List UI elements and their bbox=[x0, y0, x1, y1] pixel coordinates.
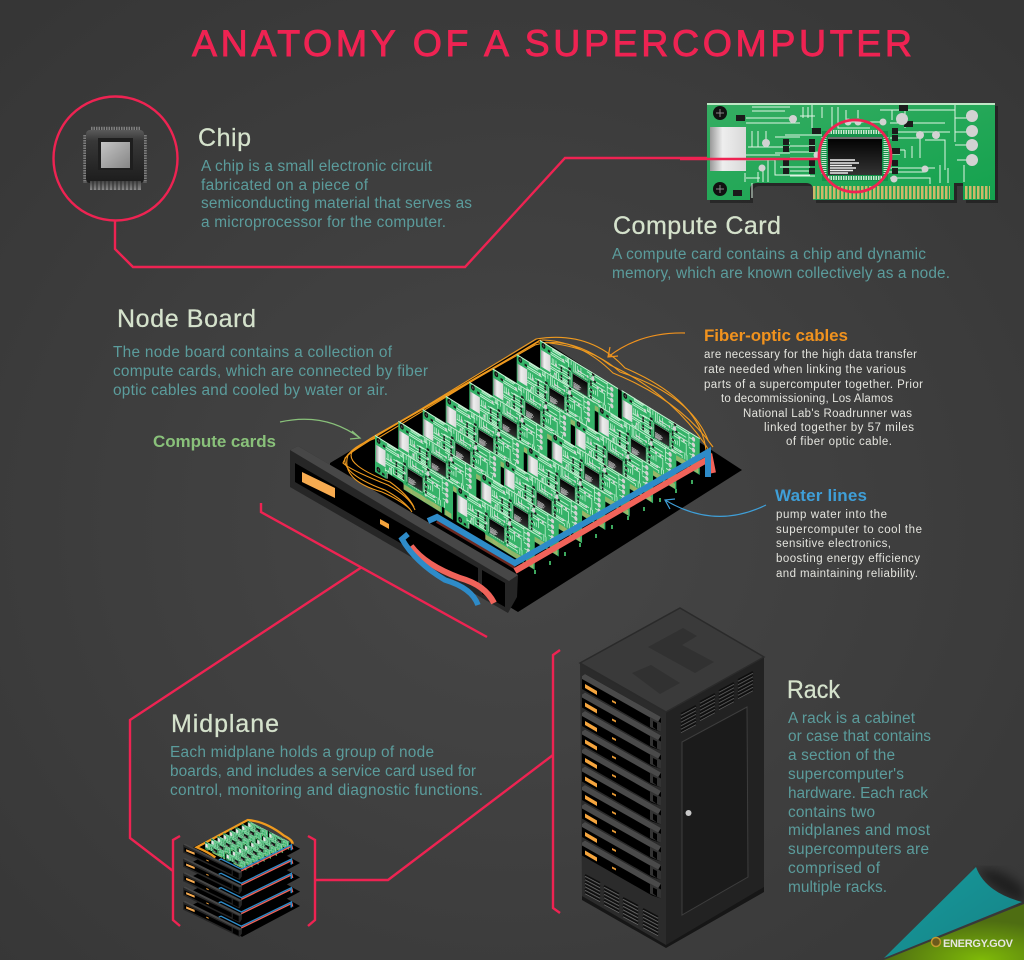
text: water lines description: pump water into the bbox=[776, 509, 887, 521]
text: rack description: midplanes and most bbox=[788, 822, 931, 839]
text: water lines description: supercomputer to cool the bbox=[776, 524, 922, 536]
label: fiber-optic cables: Fiber-optic cables bbox=[704, 326, 848, 345]
arrow: fiber-optic cables bbox=[608, 333, 685, 357]
panel: midplane bbox=[170, 710, 483, 937]
icon: microchip bbox=[85, 128, 145, 190]
text: fiber-optic description: rate needed when linking the various bbox=[704, 364, 906, 376]
heading: compute card: Compute Card bbox=[613, 212, 781, 240]
page curl with energy.gov logo bbox=[884, 867, 1024, 960]
text: rack description: supercomputer's bbox=[788, 766, 904, 783]
text: chip description: A chip is a small electronic circuit bbox=[201, 158, 433, 175]
text: rack description: contains two bbox=[788, 804, 875, 821]
illustration: node board bbox=[290, 337, 742, 613]
text: energy.gov: ENERGY.GOV bbox=[943, 938, 1014, 950]
panel: rack bbox=[580, 608, 931, 948]
label: compute cards: Compute cards bbox=[153, 432, 276, 451]
text: chip description: semiconducting material that serves as bbox=[201, 195, 472, 212]
text: midplane description: boards, and includes a service card used for bbox=[170, 763, 476, 780]
text: fiber-optic description: are necessary for the high data transfer bbox=[704, 349, 917, 361]
heading: midplane: Midplane bbox=[171, 710, 279, 738]
text: rack description: a section of the bbox=[788, 747, 895, 764]
connector lines: node board to midplane to rack bbox=[130, 503, 560, 926]
panel: node board bbox=[113, 305, 923, 613]
icon: energy.gov seal bbox=[932, 938, 940, 946]
text: chip description: fabricated on a piece of bbox=[201, 177, 369, 194]
text: node board description: optic cables and cooled by water or air. bbox=[113, 382, 388, 399]
connector: chip to compute card bbox=[115, 158, 820, 267]
text: compute card description: A compute card contains a chip and dynamic bbox=[612, 246, 926, 263]
illustration: rack cabinet bbox=[580, 608, 764, 948]
text: fiber-optic description: to decommissioning, Los Alamos bbox=[721, 393, 893, 405]
text: fiber-optic description: of fiber optic cable. bbox=[786, 436, 892, 448]
text: rack description: multiple racks. bbox=[788, 879, 887, 896]
heading: node board: Node Board bbox=[117, 305, 256, 333]
title: ANATOMY OF A SUPERCOMPUTER bbox=[192, 22, 912, 64]
text: water lines description: and maintaining reliability. bbox=[776, 568, 918, 580]
text: chip description: a microprocessor for the computer. bbox=[201, 214, 446, 231]
panel: compute card bbox=[612, 103, 998, 282]
text: midplane description: control, monitoring and diagnostic functions. bbox=[170, 782, 483, 799]
text: node board description: The node board contains a collection of bbox=[113, 344, 393, 361]
panel: chip bbox=[54, 96, 820, 267]
label: water lines: Water lines bbox=[775, 486, 867, 505]
text: compute card description: memory, which are known collectively as a node. bbox=[612, 265, 950, 282]
text: fiber-optic description: parts of a supercomputer together. Prior bbox=[704, 379, 923, 391]
icon: compute card bbox=[680, 103, 998, 203]
text: water lines description: sensitive electronics, bbox=[776, 538, 891, 550]
heading: rack: Rack bbox=[787, 676, 840, 704]
text: midplane description: Each midplane holds a group of node bbox=[170, 744, 434, 761]
heading: chip: Chip bbox=[198, 124, 251, 152]
arrow: compute cards bbox=[280, 419, 360, 439]
text: fiber-optic description: linked together by 57 miles bbox=[764, 422, 914, 434]
text: rack description: A rack is a cabinet bbox=[788, 710, 916, 727]
text: rack description: or case that contains bbox=[788, 728, 931, 745]
text: rack description: hardware. Each rack bbox=[788, 785, 928, 802]
text: rack description: supercomputers are bbox=[788, 841, 929, 858]
text: water lines description: boosting energy efficiency bbox=[776, 553, 920, 565]
text: fiber-optic description: National Lab's Roadrunner was bbox=[743, 408, 912, 420]
text: node board description: compute cards, which are connected by fiber bbox=[113, 363, 428, 380]
arrow: water lines bbox=[665, 499, 766, 516]
illustration: midplane stack bbox=[183, 820, 300, 937]
magnifier circle bbox=[54, 96, 178, 220]
text: rack description: comprised of bbox=[788, 860, 881, 877]
compute cards group bbox=[375, 340, 700, 570]
